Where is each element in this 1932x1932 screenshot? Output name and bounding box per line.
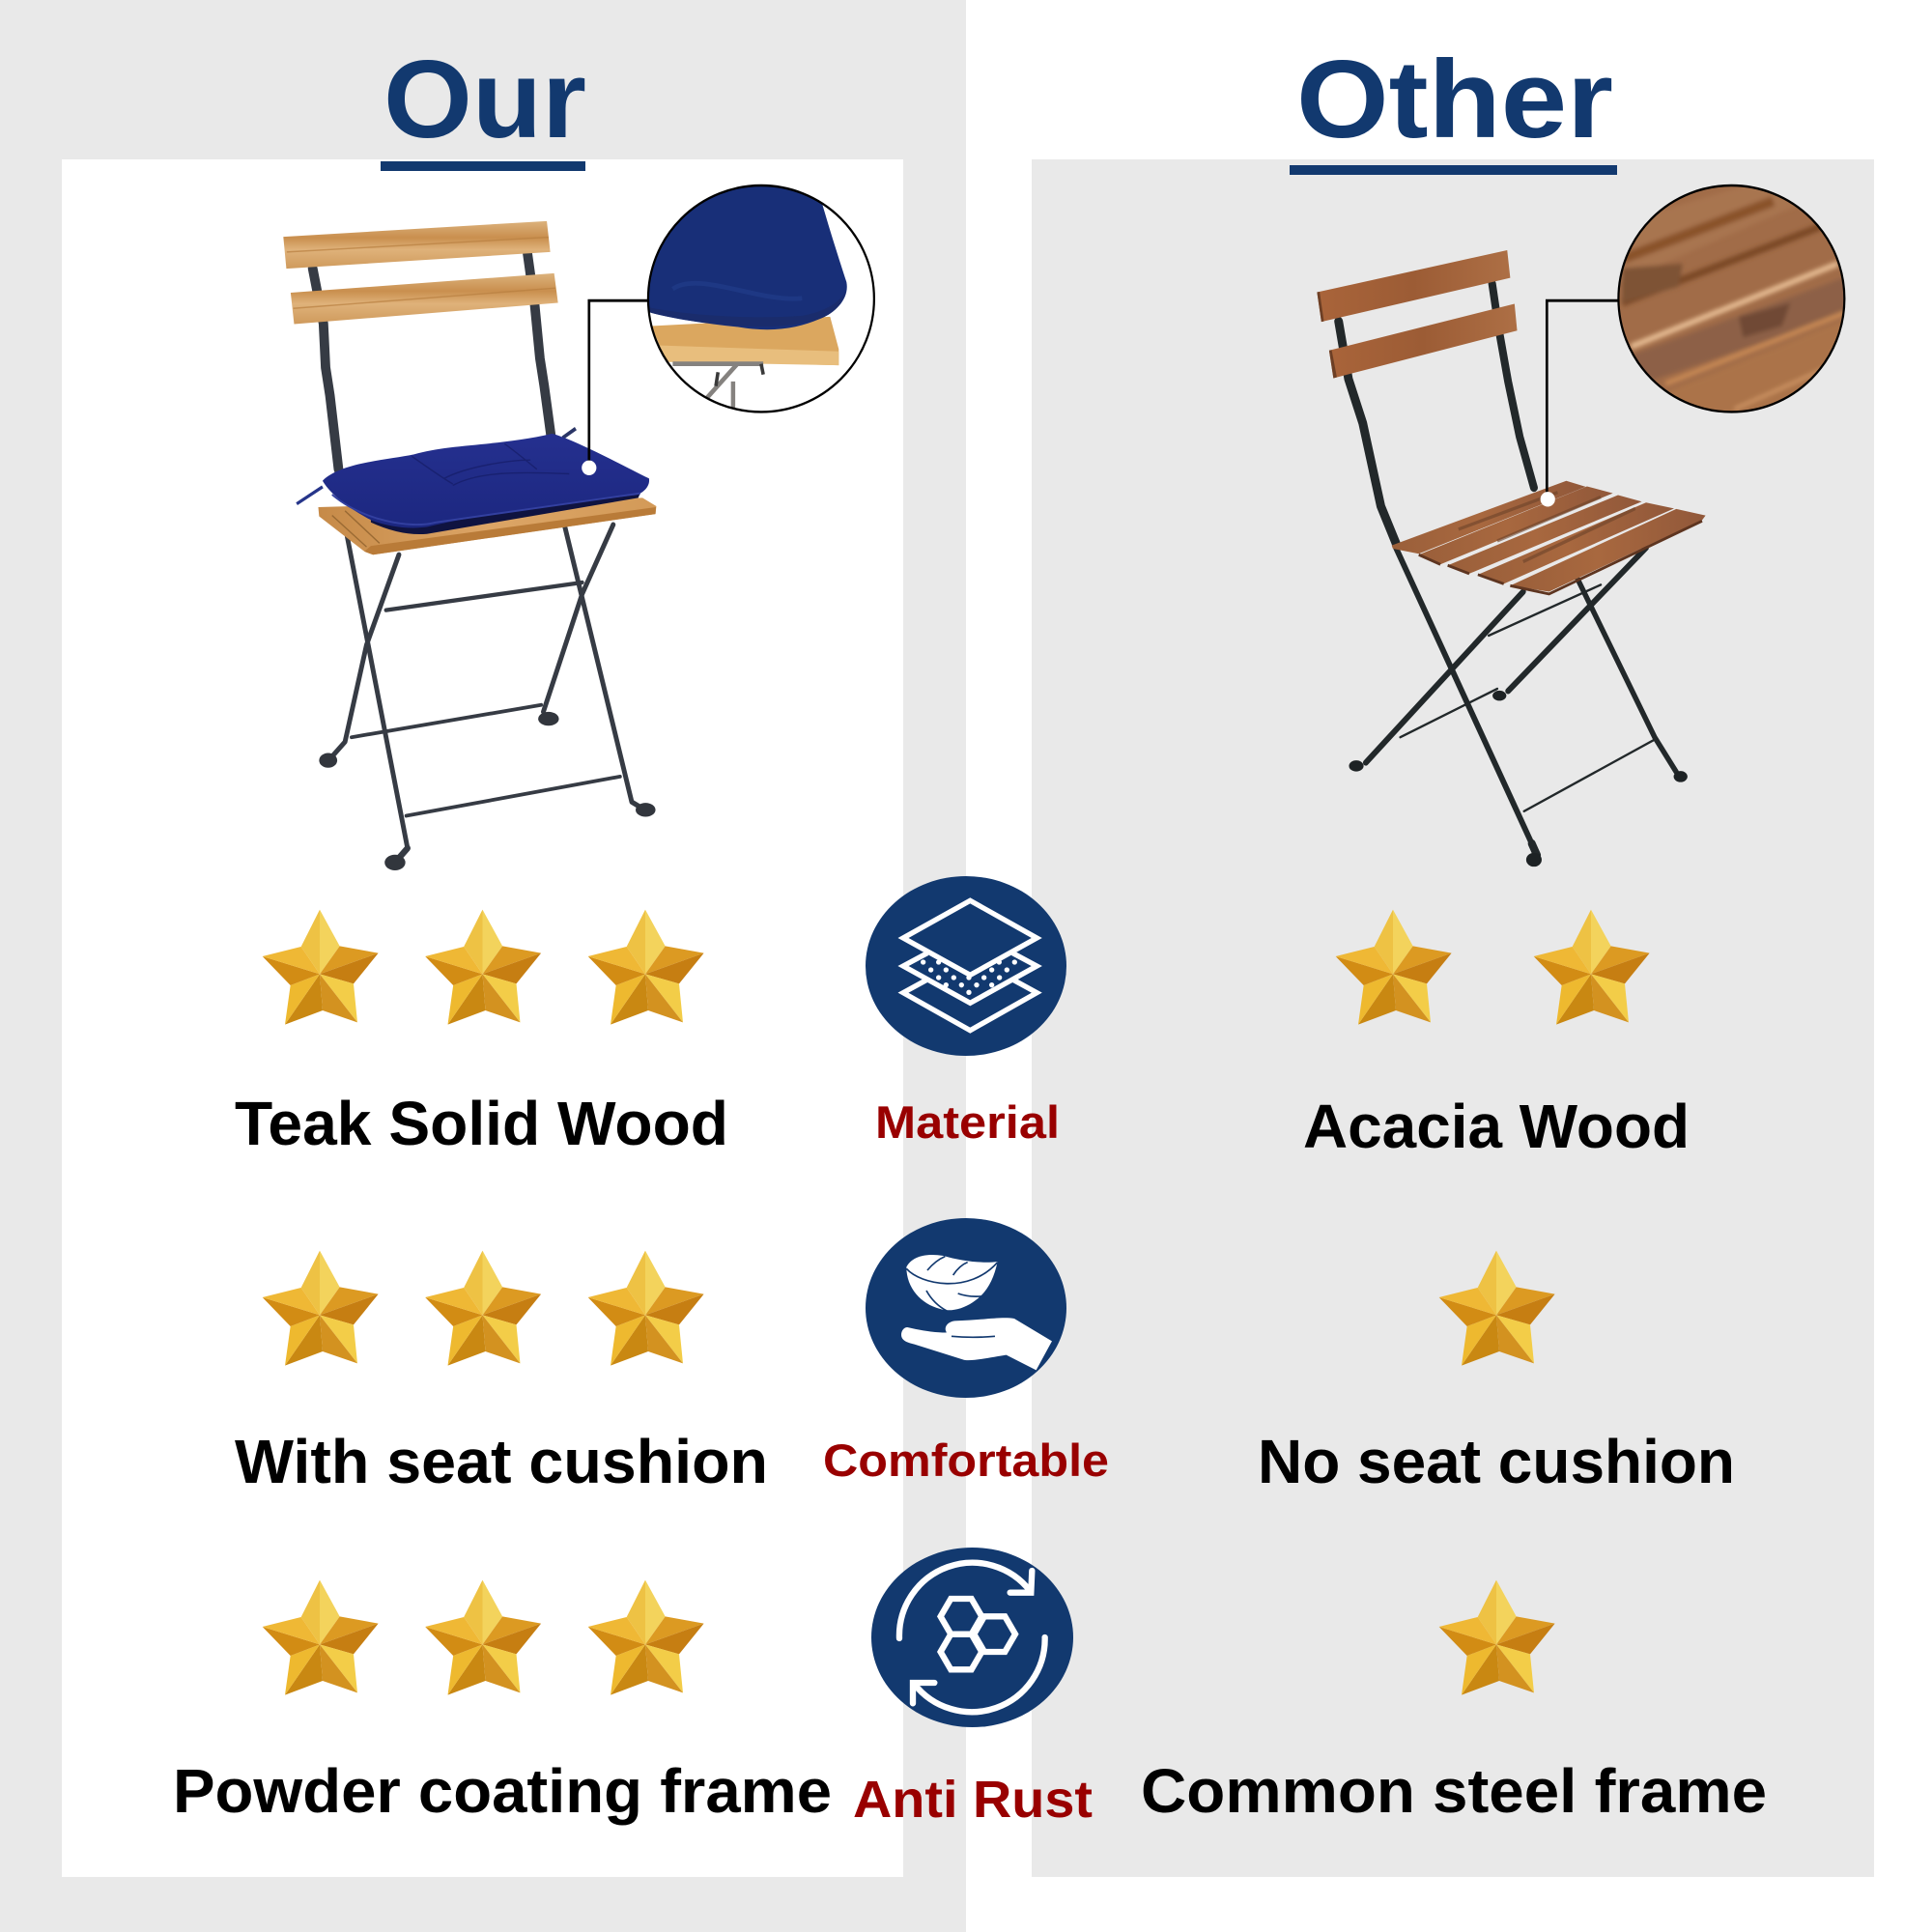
chair: acacia	[1317, 250, 1706, 867]
heading: Other: Other	[1296, 39, 1613, 161]
rating: our material, three stars	[263, 910, 704, 1025]
icon: material layers	[866, 876, 1066, 1056]
text: Common steel frame: Common steel frame	[1141, 1756, 1767, 1826]
rating: our rust protection, three stars	[263, 1580, 704, 1695]
icon: anti rust cycle	[871, 1548, 1073, 1727]
text: Acacia Wood: Acacia Wood	[1303, 1092, 1690, 1161]
label: Comfortable: Comfortable	[823, 1435, 1109, 1486]
icon: comfort leaf in hand	[866, 1218, 1066, 1398]
left half background	[0, 0, 966, 1932]
heading: Our: Our	[384, 39, 586, 161]
label: Anti Rust: Anti Rust	[853, 1771, 1093, 1829]
panel: other product	[1032, 159, 1874, 1877]
callout: acacia wood detail	[1541, 174, 1851, 506]
rating: other rust protection, one star	[1439, 1580, 1555, 1695]
callout: cushion detail	[582, 176, 875, 475]
rating: other material, two stars	[1336, 910, 1650, 1025]
text: No seat cushion: No seat cushion	[1258, 1427, 1735, 1496]
text: With seat cushion: With seat cushion	[235, 1427, 768, 1496]
rating: our comfort, three stars	[263, 1251, 704, 1366]
panel: our product	[62, 159, 903, 1877]
rating: other comfort, one star	[1439, 1251, 1555, 1366]
chair: teak with cushion	[283, 221, 656, 870]
text: Teak Solid Wood: Teak Solid Wood	[235, 1089, 728, 1158]
label: Material: Material	[875, 1096, 1060, 1148]
text: Powder coating frame: Powder coating frame	[173, 1756, 832, 1826]
